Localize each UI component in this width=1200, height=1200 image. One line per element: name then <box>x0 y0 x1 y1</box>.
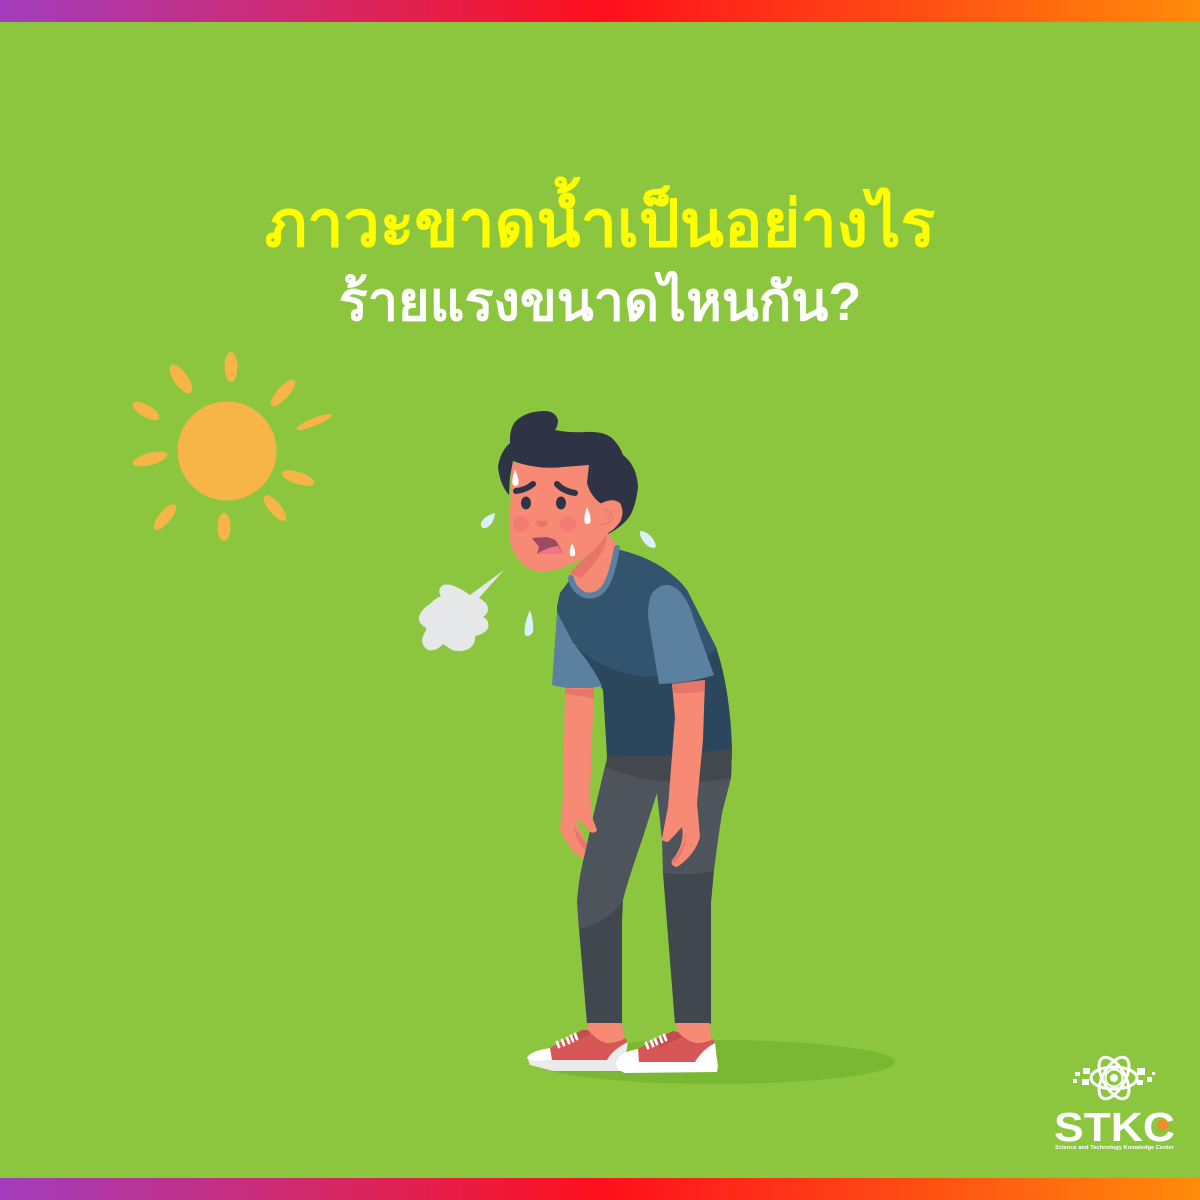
right shoe <box>616 1023 718 1073</box>
face details <box>512 470 591 556</box>
ear <box>596 500 622 533</box>
icon: sun <box>130 352 333 541</box>
left arm <box>560 688 597 859</box>
neck and collar <box>570 533 618 598</box>
logo pixel dots <box>1073 1068 1155 1085</box>
hair <box>498 411 638 534</box>
left sleeve <box>552 612 602 689</box>
logo atom emblem <box>1091 1053 1137 1103</box>
right arm <box>662 680 705 867</box>
bottom gradient bar <box>0 1178 1200 1200</box>
pants <box>577 748 732 1024</box>
top gradient bar <box>0 0 1200 22</box>
ground shadow <box>535 1040 895 1084</box>
logo orange dot <box>1158 1120 1168 1130</box>
icon: breath puff <box>419 570 504 651</box>
right sleeve <box>648 585 714 684</box>
character: man <box>498 411 732 1073</box>
logo tagline: Science and Technology Knowledge Center <box>1055 1145 1175 1151</box>
head <box>509 460 612 572</box>
title: ภาวะขาดน้ำเป็นอย่างไร <box>265 188 935 260</box>
left shoe <box>527 1023 628 1071</box>
subtitle: ร้ายแรงขนาดไหนกัน? <box>339 272 861 332</box>
sweat drops in the air <box>481 513 656 636</box>
logo wordmark: STKC <box>1054 1104 1175 1150</box>
shirt <box>557 550 732 756</box>
STKC logo <box>1054 1053 1175 1151</box>
